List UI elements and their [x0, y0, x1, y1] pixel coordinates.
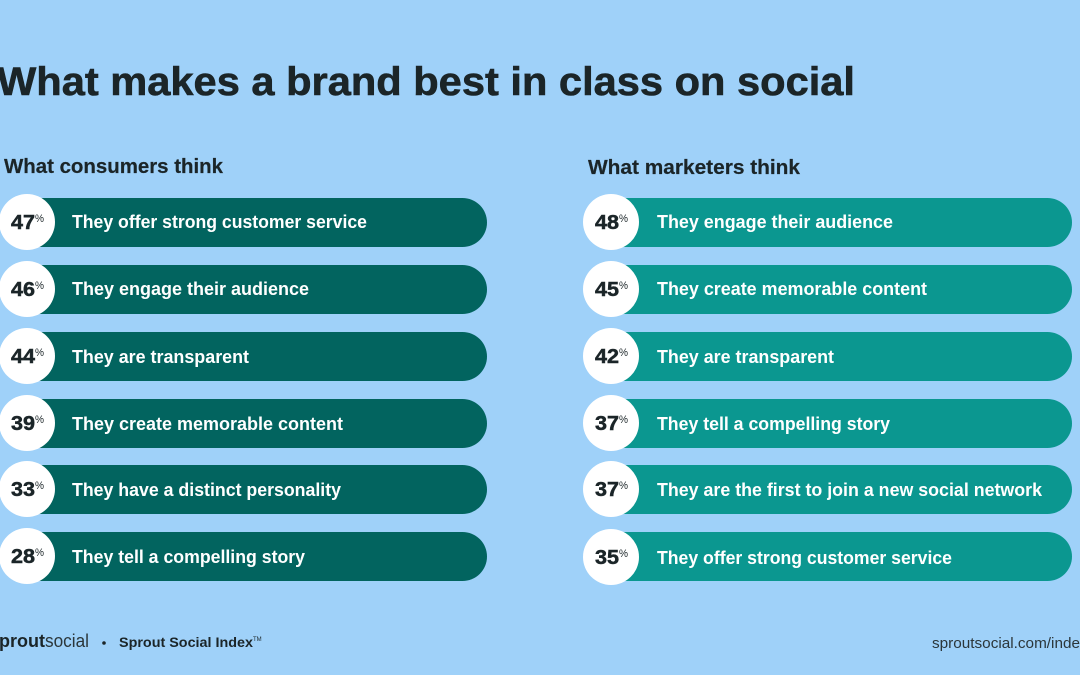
- row: 47% customer service: %: [35, 213, 44, 225]
- row: 48% engage audience: 48: [595, 212, 619, 234]
- row: 39% memorable content: They create memorable content: [72, 414, 343, 434]
- footer: sprout social logo: prout: [0, 631, 45, 651]
- row: 44% transparent: [0, 328, 487, 384]
- footer: sprout social index: TM: [253, 637, 262, 643]
- row: 42% transparent: They are transparent: [657, 347, 834, 367]
- row: 47% customer service: They offer strong customer service: [72, 212, 367, 232]
- row: 44% transparent: %: [35, 347, 44, 359]
- row: 33% distinct personality: 33: [11, 479, 35, 501]
- row: 44% transparent: 44: [11, 346, 36, 368]
- row: 45% memorable content: [583, 261, 1072, 317]
- row: 35% customer service: 35: [595, 547, 619, 569]
- row: 37% first to join: 37: [595, 479, 619, 501]
- row: 39% memorable content: 39: [11, 413, 35, 435]
- row: 39% memorable content: [0, 395, 487, 451]
- row: 35% customer service: %: [619, 548, 628, 560]
- footer: sprout social logo: [0, 631, 89, 651]
- row: 37% first to join: They are the first to join a new social network: [657, 480, 1043, 500]
- row: 46% engage audience: %: [35, 280, 44, 292]
- row: 42% transparent: %: [619, 347, 628, 359]
- row: 46% engage audience: [0, 261, 487, 317]
- footer: sprout social logo: social: [45, 631, 89, 651]
- row: 45% memorable content: 45: [595, 279, 619, 301]
- row: 42% transparent: 42: [595, 346, 619, 368]
- row: 28% compelling story: [0, 528, 487, 584]
- row: 37% compelling story: %: [619, 414, 628, 426]
- row: 37% compelling story: 37: [595, 413, 619, 435]
- row: 28% compelling story: 28: [11, 546, 35, 568]
- panel: what marketers think: [583, 157, 1072, 585]
- row: 45% memorable content: %: [619, 280, 628, 292]
- title: What makes a brand best in class on social: [0, 60, 855, 104]
- footer: separator dot: [102, 641, 106, 645]
- row: 39% memorable content: %: [35, 414, 44, 426]
- row: 47% customer service: 47: [11, 212, 35, 234]
- row: 47% customer service: [0, 194, 487, 250]
- row: 33% distinct personality: They have a distinct personality: [72, 480, 341, 500]
- row: 37% compelling story: They tell a compelling story: [657, 414, 890, 434]
- row: 35% customer service: They offer strong customer service: [657, 548, 952, 568]
- row: 48% engage audience: %: [619, 213, 628, 225]
- heading: consumers: What consumers think: [4, 156, 224, 178]
- row: 28% compelling story: They tell a compelling story: [72, 547, 305, 567]
- row: 42% transparent: [583, 328, 1072, 384]
- row: 28% compelling story: %: [35, 547, 44, 559]
- row: 33% distinct personality: %: [35, 480, 44, 492]
- row: 37% first to join: %: [619, 480, 628, 492]
- row: 37% first to join: [583, 461, 1072, 517]
- row: 37% compelling story: [583, 395, 1072, 451]
- panel: what consumers think: [0, 156, 487, 584]
- row: 33% distinct personality: [0, 461, 487, 517]
- row: 48% engage audience: They engage their audience: [657, 212, 893, 232]
- row: 35% customer service: [583, 529, 1072, 585]
- footer: url: sproutsocial.com/inde: [932, 635, 1080, 652]
- row: 46% engage audience: 46: [11, 279, 35, 301]
- row: 45% memorable content: They create memorable content: [657, 279, 927, 299]
- heading: marketers: What marketers think: [588, 157, 801, 179]
- footer: sprout social index: Sprout Social Index: [119, 634, 253, 650]
- row: 44% transparent: They are transparent: [72, 347, 249, 367]
- row: 48% engage audience: [583, 194, 1072, 250]
- row: 46% engage audience: They engage their audience: [72, 279, 309, 299]
